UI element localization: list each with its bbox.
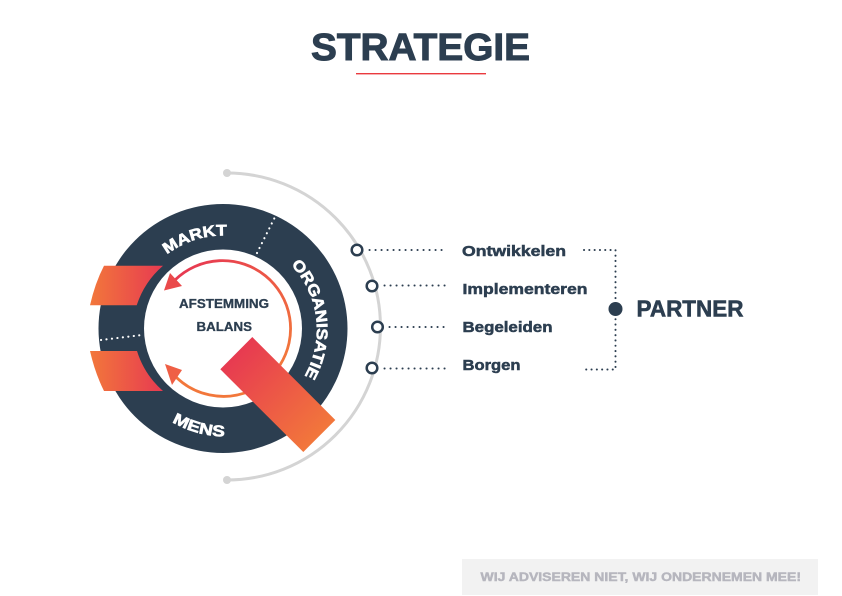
top circular arrow: [164, 261, 291, 365]
centre text: AFSTEMMING: [179, 296, 269, 311]
footer banner: WIJ ADVISEREN NIET, WIJ ONDERNEMEN MEE!: [480, 572, 801, 584]
label: Ontwikkelen: Ontwikkelen: [462, 243, 566, 260]
diagonal gradient bar: [220, 337, 335, 452]
label: Implementeren: Implementeren: [462, 281, 588, 298]
white centre circle: [144, 250, 302, 408]
centre text: [179, 296, 269, 334]
title underline: [356, 73, 486, 74]
node: begeleiden: [372, 322, 449, 332]
dotted bracket: [584, 250, 616, 370]
node: ontwikkelen: [352, 245, 447, 255]
footer banner: [462, 559, 818, 595]
navy ring: [98, 204, 348, 453]
label: PARTNER: PARTNER: [636, 296, 744, 322]
bottom circular arrow: [165, 364, 250, 396]
partner dot: [608, 302, 622, 316]
title: STRATEGIE: [311, 27, 530, 69]
label: Begeleiden: Begeleiden: [462, 319, 552, 336]
node: implementeren: [367, 281, 449, 291]
label: ORGANISATIE: ORGANISATIE: [293, 260, 328, 380]
centre text: BALANS: [196, 319, 252, 334]
outer grey arc: [223, 169, 380, 484]
ring divider: markt / organisatie: [257, 217, 275, 253]
label: Borgen: Borgen: [462, 357, 520, 374]
bottom orange band: [90, 351, 163, 391]
label: MENS: MENS: [172, 412, 224, 437]
top orange band: [90, 266, 163, 305]
ring divider: markt / mens: [101, 335, 142, 340]
label: MARKT: MARKT: [162, 224, 227, 254]
node: borgen: [367, 363, 449, 373]
